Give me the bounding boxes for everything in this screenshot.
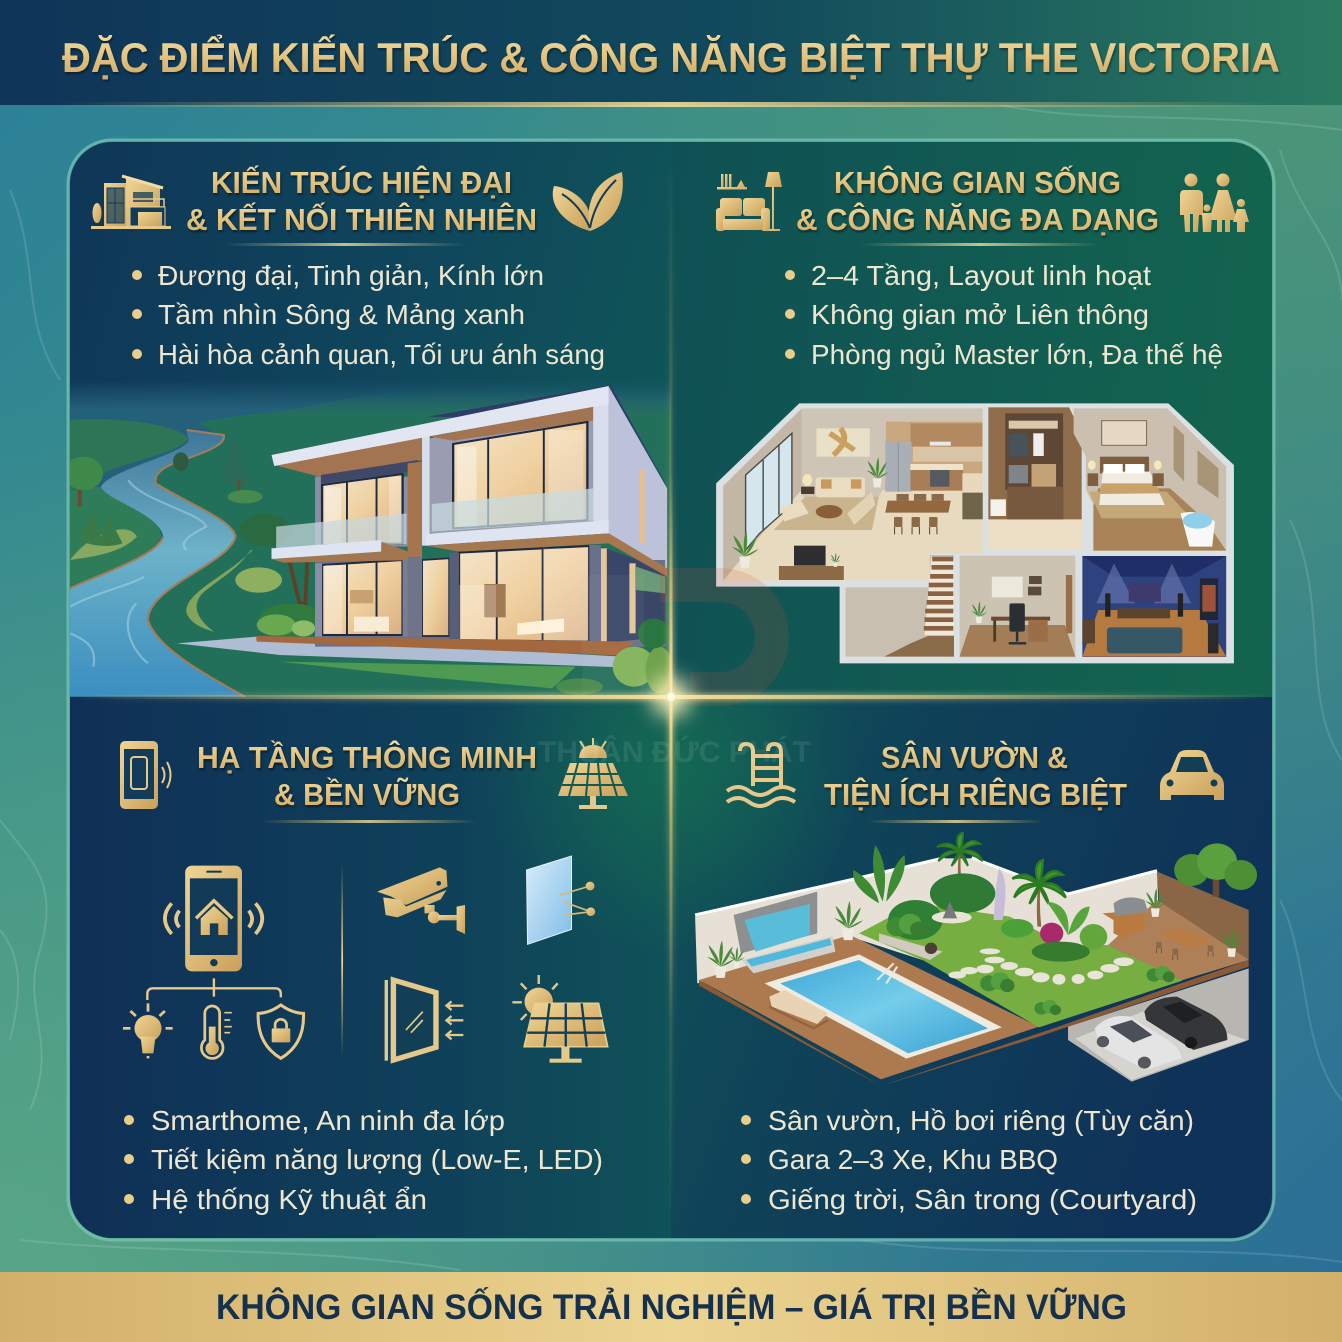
- icon: smartphone home: [165, 866, 262, 971]
- garden plants: [937, 833, 983, 883]
- bushes: [612, 646, 650, 687]
- watermark text: THUẬN ĐỨC PHÁT: [538, 735, 811, 769]
- stepping stones: [948, 948, 1134, 985]
- heading: smart infrastructure: [197, 739, 537, 812]
- waterfall: [734, 892, 817, 953]
- divider: [341, 863, 343, 1057]
- bullet list: infrastructure: Smarthome, An ninh đa lớp: [151, 1105, 505, 1136]
- bullet list: living space: 2–4 Tầng, Layout linh hoạt: [811, 260, 1151, 291]
- heading: garden and amenities: SÂN VƯỜN &: [881, 739, 1068, 775]
- icon: security camera: [377, 867, 465, 934]
- plants: [867, 457, 888, 487]
- heading underline: [225, 243, 465, 246]
- watermark logo: [582, 575, 772, 695]
- main rounded panel: [64, 140, 1274, 1240]
- TV: [779, 566, 844, 580]
- kitchen: [886, 422, 982, 474]
- bullet list: architecture: Tầm nhìn Sông & Mảng xanh: [158, 299, 525, 330]
- living furniture: [774, 497, 879, 530]
- upper left: [274, 435, 424, 477]
- center column: [408, 462, 422, 557]
- icon: solar panel: [558, 738, 628, 809]
- columns: [315, 563, 322, 637]
- panel: living space: [671, 142, 1272, 697]
- icon: shield lock: [258, 1005, 304, 1058]
- icon: leaves: [553, 172, 623, 231]
- icon: thermometer: [201, 1006, 232, 1058]
- gold cross divider: [70, 142, 1272, 1238]
- title band: [0, 0, 1342, 105]
- heading: modern architecture: KIẾN TRÚC HIỆN ĐẠI: [211, 164, 512, 200]
- bullet list: infrastructure: Tiết kiệm năng lượng (Low-E, LED): [151, 1144, 603, 1175]
- bullet list: living space: Không gian mở Liên thông: [811, 299, 1149, 330]
- BBQ: [1103, 910, 1144, 938]
- upper right: [422, 435, 430, 546]
- walls: [695, 858, 1159, 983]
- bullet list: architecture: Hài hòa cảnh quan, Tối ưu ánh sáng: [158, 339, 605, 370]
- panel: garden and amenities: [671, 697, 1272, 1238]
- sun lounger: [769, 990, 828, 1024]
- icon: house: [91, 176, 171, 229]
- heading: smart infrastructure: HẠ TẦNG THÔNG MINH: [197, 739, 537, 775]
- bedroom: [1074, 408, 1226, 551]
- trees: [78, 489, 82, 507]
- icon: window: [385, 980, 463, 1061]
- bullet list: infrastructure: Hệ thống Kỹ thuật ẩn: [151, 1184, 427, 1215]
- title: ĐẶC ĐIỂM KIẾN TRÚC & CÔNG NĂNG BIỆT THỰ THE VICTORIA: [62, 33, 1280, 81]
- icon: phone: [120, 741, 170, 809]
- bullet list: architecture: [132, 260, 605, 370]
- icon group: smart home and security: [123, 856, 608, 1063]
- heading: living space: & CÔNG NĂNG ĐA DẠNG: [796, 201, 1159, 237]
- icon: sofa and lamp: [716, 172, 782, 231]
- heading: living space: [796, 164, 1159, 237]
- panel: smart infrastructure: [70, 697, 671, 1238]
- heading underline: [868, 820, 1043, 823]
- ground glass: [322, 560, 403, 635]
- decks: [256, 636, 634, 655]
- cars: [1144, 997, 1227, 1050]
- icon: pool ladder: [727, 744, 795, 806]
- bullet list: garden: Giếng trời, Sân trong (Courtyard): [768, 1184, 1197, 1215]
- dining: [885, 501, 951, 513]
- heading: garden and amenities: TIỆN ÍCH RIÊNG BIỆT: [824, 776, 1127, 812]
- heading: modern architecture: [186, 164, 537, 237]
- icon: family: [1180, 174, 1249, 232]
- bullet list: garden: Gara 2–3 Xe, Khu BBQ: [768, 1144, 1058, 1175]
- outdoor table: [1159, 928, 1213, 948]
- wardrobe room: [988, 407, 1082, 519]
- heading underline: [262, 820, 477, 823]
- living room: [723, 408, 983, 581]
- illustration: isometric garden: [695, 833, 1257, 1086]
- illustration: cutaway floor plan: [716, 403, 1234, 663]
- icon: Low-E glass: [527, 856, 595, 944]
- icon: car: [1160, 750, 1224, 800]
- panel: modern architecture: [70, 142, 671, 697]
- illustration: villa by the river: [70, 385, 671, 697]
- stairs: [846, 555, 954, 657]
- bullet list: garden: Sân vườn, Hồ bơi riêng (Tùy căn): [768, 1105, 1194, 1136]
- bullet list: living space: [785, 260, 1223, 370]
- icon: light bulb: [123, 1003, 173, 1058]
- bullet list: garden: [741, 1105, 1197, 1215]
- tree: [1213, 880, 1219, 897]
- tagline: KHÔNG GIAN SỐNG TRẢI NGHIỆM – GIÁ TRỊ BỀN VỮNG: [216, 1287, 1127, 1327]
- river: [70, 430, 245, 697]
- bullet list: architecture: Đương đại, Tinh giản, Kính lớn: [158, 260, 544, 291]
- tagline band: [0, 1272, 1342, 1342]
- deck: [699, 960, 1249, 1086]
- bullet list: living space: Phòng ngủ Master lớn, Đa thế hệ: [811, 339, 1223, 370]
- heading: modern architecture: & KẾT NỐI THIÊN NHIÊN: [186, 201, 537, 237]
- garage: [1068, 968, 1249, 1082]
- office: [960, 556, 1075, 657]
- heading underline: [860, 243, 1100, 246]
- house roof and side: [428, 385, 667, 487]
- ground walls: [315, 560, 665, 647]
- icon: solar and sun: [512, 975, 608, 1063]
- lawn: [859, 903, 1183, 1027]
- theater: [1082, 556, 1226, 657]
- pool: [765, 954, 1002, 1059]
- heading: living space: KHÔNG GIAN SỐNG: [834, 164, 1121, 200]
- heading: garden and amenities: [824, 739, 1127, 812]
- bullet list: infrastructure: [124, 1105, 603, 1215]
- heading: smart infrastructure: & BỀN VỮNG: [274, 776, 460, 812]
